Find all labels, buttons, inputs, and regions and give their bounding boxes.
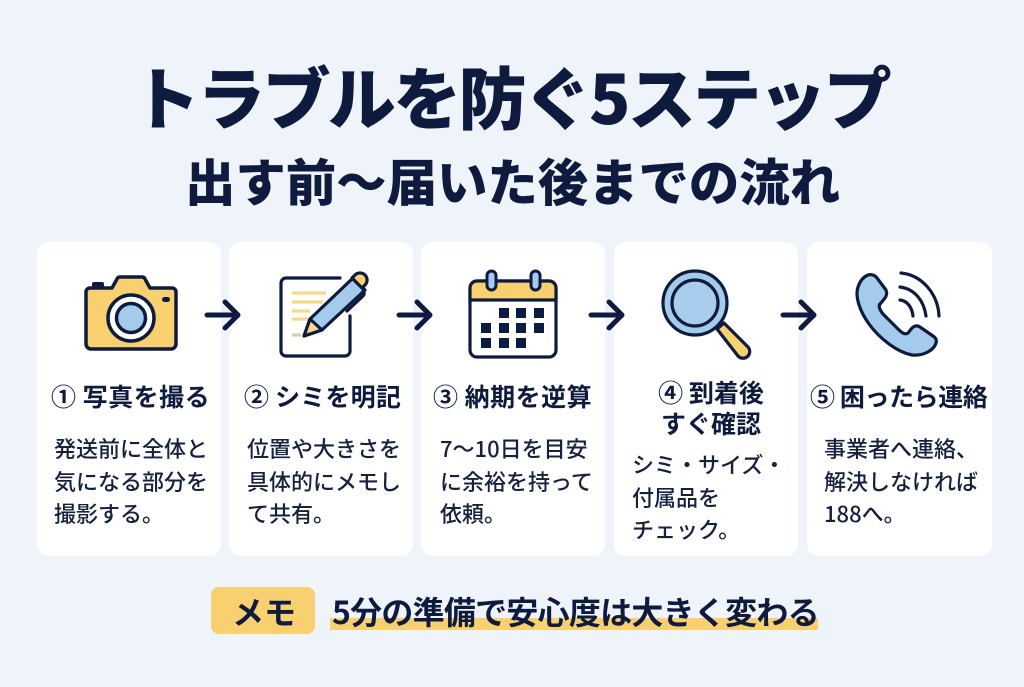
heading: step 1: ① 写真を撮る <box>51 378 210 414</box>
text: step 5: 解決しなければ <box>824 464 978 496</box>
text: step 1: 撮影する。 <box>54 497 164 529</box>
icon: camera <box>84 275 178 351</box>
heading: step 3: ③ 納期を逆算 <box>433 378 592 414</box>
text: step 1 <box>54 432 208 529</box>
icon: telephone <box>855 271 941 357</box>
panel: step 3 <box>421 242 605 556</box>
text: step 4: 付属品を <box>632 480 720 512</box>
panel: step 2 <box>229 242 413 556</box>
memo text: 5分の準備で安心度は大きく変わる <box>332 588 819 634</box>
text: step 2: 位置や大きさを <box>247 432 401 464</box>
subtitle: 出す前〜届いた後までの流れ <box>185 143 840 216</box>
text: step 5: 188へ。 <box>824 497 906 529</box>
text: step 5: 事業者へ連絡、 <box>824 432 978 464</box>
memo label: メモ <box>232 588 296 634</box>
heading: step 4: すぐ確認 <box>661 405 761 441</box>
arrow: 4 to 5 <box>780 300 816 330</box>
arrow: 3 to 4 <box>588 300 624 330</box>
text: step 4 <box>632 448 785 545</box>
text: step 2 <box>247 432 401 529</box>
text: step 2: 具体的にメモし <box>247 464 401 496</box>
text: step 3 <box>440 432 593 529</box>
panel: step 5 <box>807 242 992 556</box>
icon: memo and pen <box>279 271 369 358</box>
title: トラブルを防ぐ5ステップ <box>132 45 889 144</box>
heading: step 4: ④ 到着後 <box>658 374 764 410</box>
memo tag <box>211 587 315 634</box>
text: step 3: 7〜10日を目安 <box>440 432 588 464</box>
text: step 5 <box>824 432 978 529</box>
heading: step 5: ⑤ 困ったら連絡 <box>810 378 987 414</box>
text: step 1: 発送前に全体と <box>54 432 208 464</box>
text: step 3: に余裕を持って <box>440 464 593 496</box>
arrow: 2 to 3 <box>396 300 432 330</box>
panel: step 1 <box>37 242 221 556</box>
arrow: 1 to 2 <box>204 300 240 330</box>
icon: magnifying glass <box>661 269 752 360</box>
panel: step 4 <box>614 242 798 556</box>
text: step 4: チェック。 <box>632 513 740 545</box>
icon: calendar <box>468 270 558 359</box>
heading: step 4 <box>658 374 764 441</box>
text: step 2: て共有。 <box>247 497 335 529</box>
heading: step 2: ② シミを明記 <box>244 378 401 414</box>
text: step 3: 依頼。 <box>440 497 506 529</box>
text: step 4: シミ・サイズ・ <box>632 448 785 480</box>
memo highlight underline <box>330 618 818 630</box>
text: step 1: 気になる部分を <box>54 464 208 496</box>
